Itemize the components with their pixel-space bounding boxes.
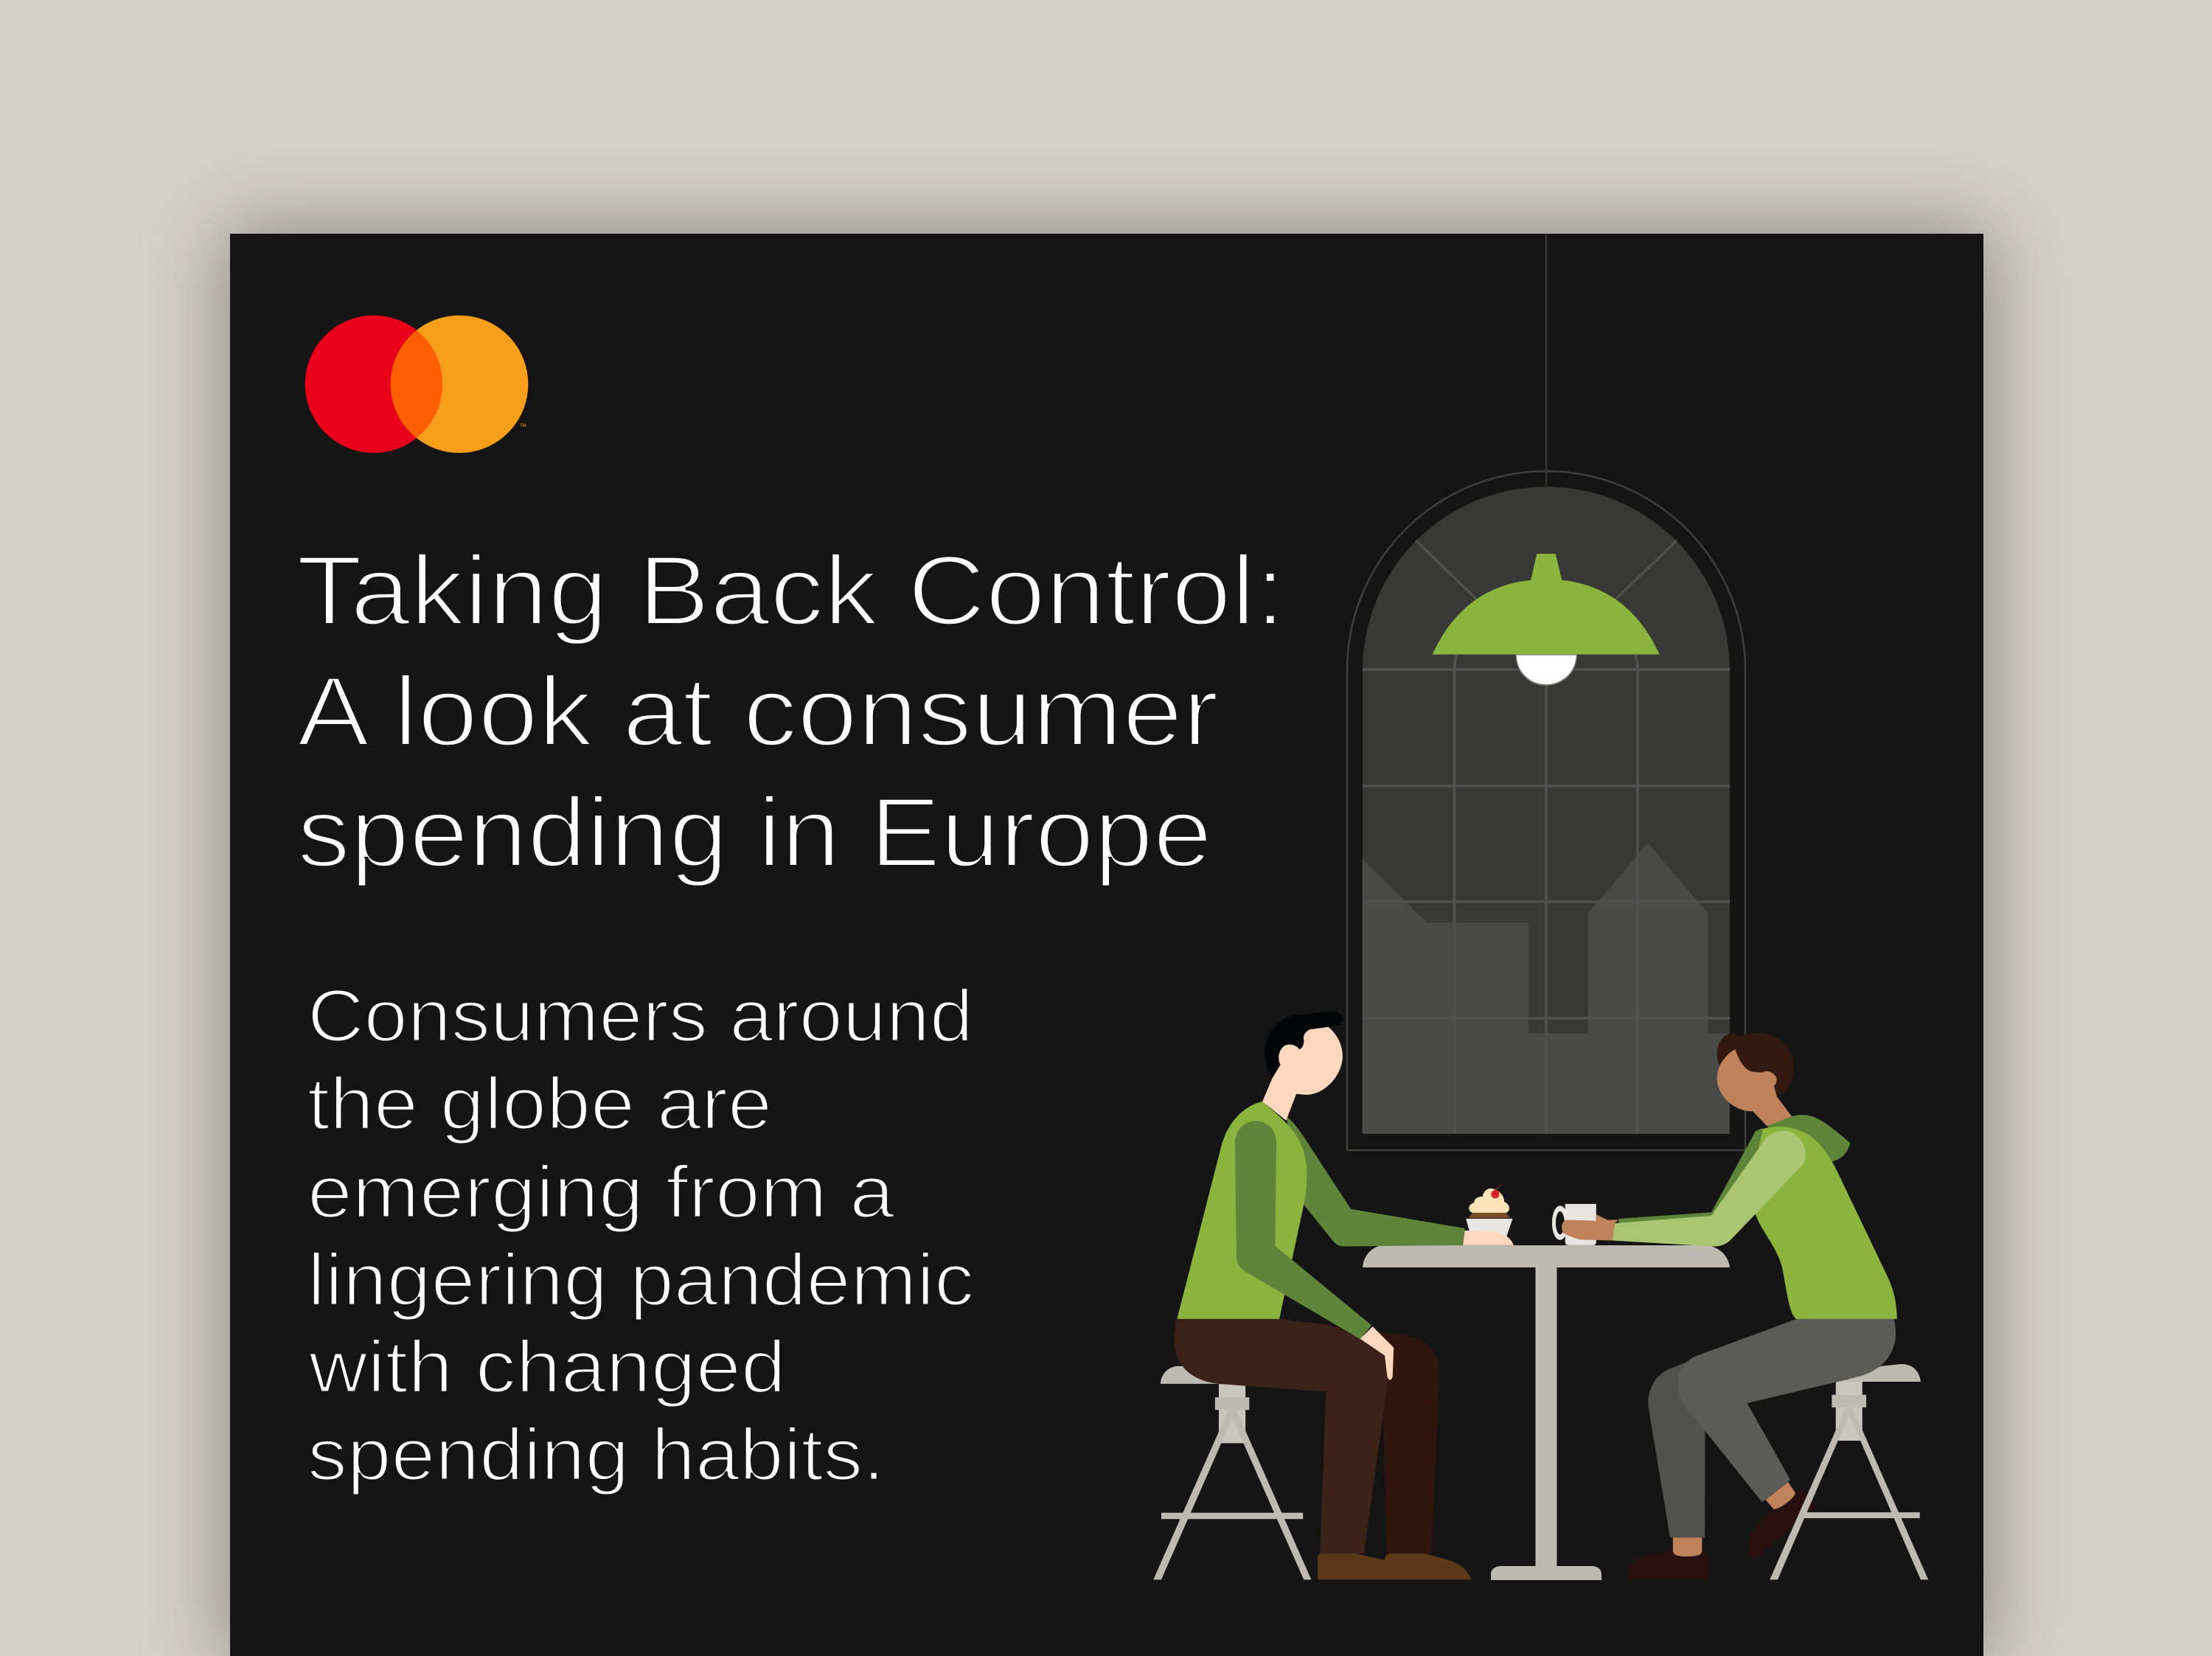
- torso: [1177, 1102, 1307, 1319]
- near arm: [1235, 1121, 1371, 1339]
- icon: Mastercard logo: TM: [520, 424, 526, 428]
- head and neck: [1262, 1027, 1343, 1121]
- person right with stool and mug: [1554, 1033, 1928, 1580]
- mug: [1554, 1204, 1596, 1245]
- panel: dark background: [230, 234, 1983, 1656]
- lamp: [1433, 554, 1660, 685]
- person left with stool and cupcake: [1153, 1012, 1514, 1580]
- head and neck: [1717, 1049, 1792, 1126]
- hand: [1562, 1214, 1618, 1241]
- stool: [1770, 1364, 1928, 1580]
- torso: [1756, 1127, 1897, 1319]
- near shoe: [1749, 1489, 1816, 1560]
- table: [1363, 1245, 1730, 1580]
- window: [1347, 471, 1745, 1150]
- body text: spending habits.: [307, 1413, 885, 1496]
- near trouser leg: [1174, 1319, 1388, 1554]
- icon: Mastercard logo: [305, 316, 528, 453]
- far trouser leg: [1279, 1319, 1439, 1554]
- title: [296, 536, 1285, 888]
- body text: [307, 975, 974, 1496]
- stool: [1153, 1366, 1311, 1580]
- near arm: [1613, 1131, 1806, 1247]
- far arm: [1286, 1116, 1465, 1247]
- body text: with changed: [308, 1326, 786, 1408]
- body text: the globe are: [307, 1062, 772, 1145]
- far shoe: [1627, 1551, 1708, 1580]
- hair: [1717, 1033, 1794, 1096]
- near foot: [1765, 1482, 1795, 1509]
- near trouser leg: [1678, 1319, 1896, 1502]
- hair: [1265, 1012, 1342, 1079]
- shoes: [1318, 1554, 1471, 1580]
- title: Taking Back Control:: [296, 536, 1285, 646]
- far foot: [1673, 1537, 1702, 1556]
- far hand: [1463, 1231, 1514, 1245]
- title: spending in Europe: [297, 778, 1212, 888]
- lamp cord: [1545, 234, 1547, 549]
- hood: [1767, 1115, 1850, 1164]
- cupcake: [1466, 1185, 1512, 1238]
- title: A look at consumer: [297, 657, 1219, 767]
- window: buildings skyline: [1363, 843, 1729, 1134]
- body text: emerging from a: [307, 1151, 894, 1234]
- body text: Consumers around: [307, 975, 973, 1057]
- far arm and shoulder: [1618, 1128, 1763, 1224]
- near hand: [1360, 1326, 1394, 1380]
- far trouser leg: [1648, 1361, 1705, 1537]
- body text: lingering pandemic: [307, 1239, 974, 1321]
